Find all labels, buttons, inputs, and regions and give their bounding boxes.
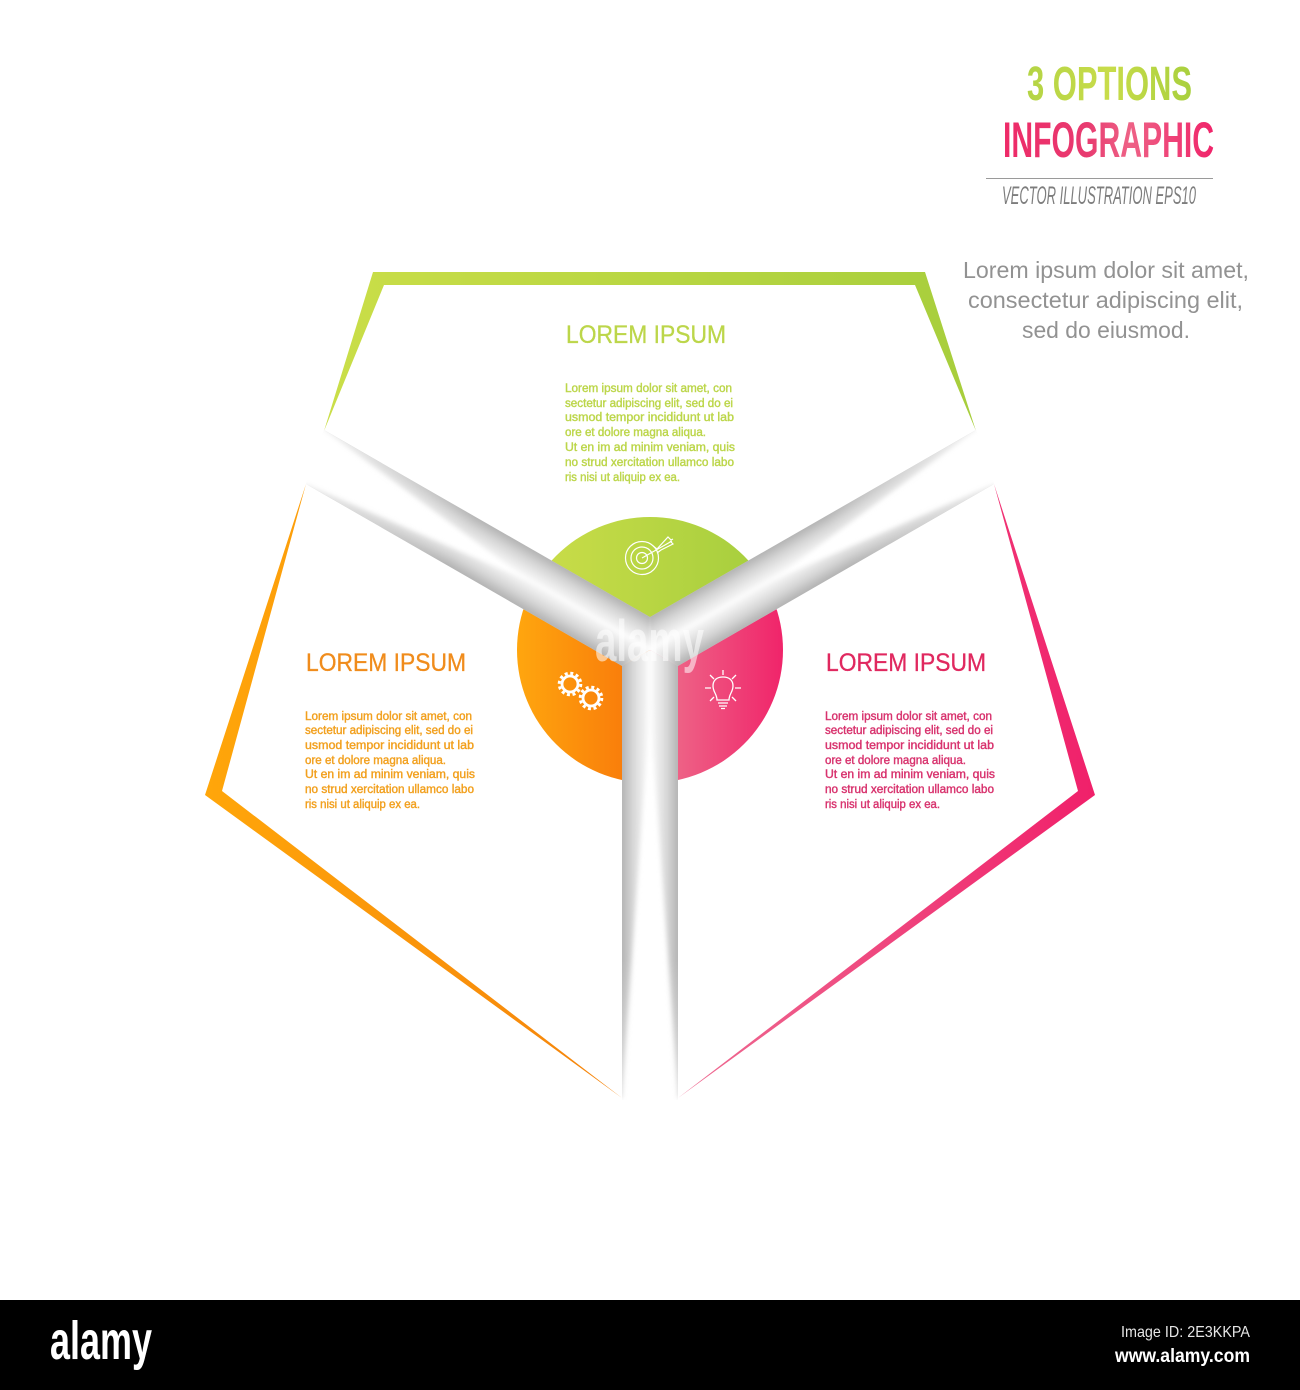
body text: top panel: ore et dolore magna aliqua. — [565, 427, 706, 439]
icon: target with arrow — [626, 537, 673, 574]
icon: light bulb — [705, 670, 741, 708]
body text: left panel: Ut en im ad minim veniam, quis — [305, 769, 475, 781]
icon: gears — [559, 673, 602, 709]
body text: top panel — [565, 383, 735, 484]
body text: top panel: ris nisi ut aliquip ex ea. — [565, 472, 680, 484]
body text: right panel: Lorem ipsum dolor sit amet, con — [825, 711, 992, 723]
footer url: www.alamy.com — [1114, 1346, 1250, 1367]
body text: top panel: Ut en im ad minim veniam, quis — [565, 442, 735, 454]
panel: top option (green) — [324, 272, 976, 484]
body text: right panel: no strud xercitation ullamco labo — [825, 784, 994, 796]
body text: left panel: ris nisi ut aliquip ex ea. — [305, 799, 420, 811]
panel: right option (pink) — [678, 484, 1095, 1098]
body text: right panel — [825, 711, 995, 811]
circle segment: green — [552, 517, 748, 617]
divider arm: upper right — [646, 423, 998, 673]
body text: right panel: Ut en im ad minim veniam, quis — [825, 769, 995, 781]
description text: Lorem ipsum dolor sit amet, — [963, 257, 1249, 283]
body text: left panel — [305, 711, 475, 811]
body text: right panel: ore et dolore magna aliqua. — [825, 755, 966, 767]
heading: left panel: LOREM IPSUM — [306, 649, 466, 677]
green tapered border — [324, 272, 976, 431]
body text: top panel: no strud xercitation ullamco labo — [565, 457, 734, 469]
divider arm: upper left — [302, 423, 654, 673]
description text: consectetur adipiscing elit, — [968, 287, 1243, 313]
heading: right panel: LOREM IPSUM — [826, 649, 986, 677]
subtitle rule — [986, 178, 1213, 179]
body text: left panel: usmod tempor incididunt ut lab — [305, 740, 474, 752]
circle segment: orange — [517, 609, 650, 780]
footer logo: alamy: alamy — [50, 1311, 152, 1371]
description text — [963, 257, 1249, 343]
body text: top panel: sectetur adipiscing elit, sed do ei — [565, 398, 733, 410]
body text: right panel: sectetur adipiscing elit, sed do ei — [825, 725, 993, 737]
description text: sed do eiusmod. — [1022, 317, 1190, 343]
footer image id: Image ID: 2E3KKPA — [1121, 1324, 1250, 1341]
body text: left panel: no strud xercitation ullamco labo — [305, 784, 474, 796]
panel: left option (orange) — [205, 484, 622, 1098]
body text: left panel: Lorem ipsum dolor sit amet, con — [305, 711, 472, 723]
pink tapered border — [678, 484, 1095, 1098]
body text: top panel: Lorem ipsum dolor sit amet, con — [565, 383, 732, 395]
body text: left panel: ore et dolore magna aliqua. — [305, 755, 446, 767]
heading: top panel: LOREM IPSUM — [566, 321, 726, 349]
body text: top panel: usmod tempor incididunt ut lab — [565, 412, 734, 424]
title: 3 OPTIONS: 3 OPTIONS — [1027, 58, 1192, 111]
central three-colour circle — [517, 517, 783, 780]
footer bar — [0, 1300, 1300, 1390]
body text: right panel: usmod tempor incididunt ut lab — [825, 740, 994, 752]
body text: right panel: ris nisi ut aliquip ex ea. — [825, 799, 940, 811]
orange tapered border — [205, 484, 622, 1098]
title block — [986, 58, 1214, 210]
Y-shaped folded divider — [302, 423, 998, 1100]
divider arm: vertical — [622, 650, 678, 1098]
circle segment: pink — [650, 609, 783, 780]
watermark: alamy: alamy — [595, 609, 704, 674]
body text: left panel: sectetur adipiscing elit, sed do ei — [305, 725, 473, 737]
